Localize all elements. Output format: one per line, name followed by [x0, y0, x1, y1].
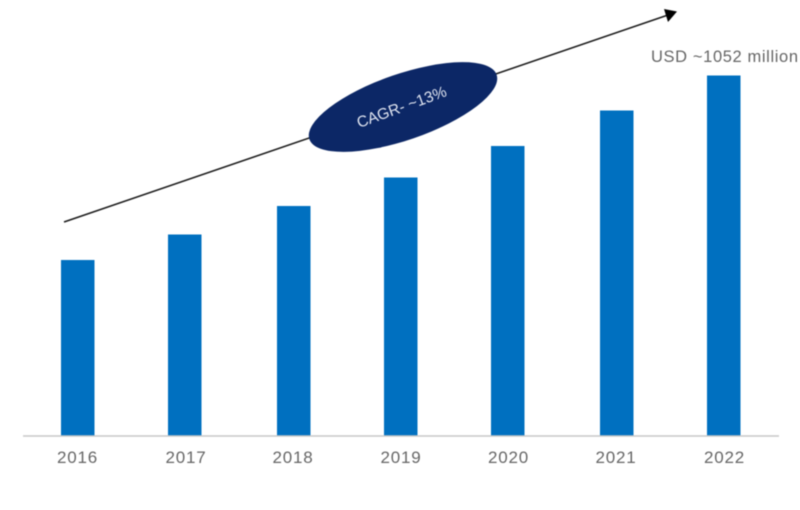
year labels: 2016 [57, 448, 98, 467]
year labels: 2022 [704, 448, 745, 467]
CAGR ellipse callout [299, 44, 507, 170]
bars [61, 76, 740, 436]
year labels: 2020 [488, 448, 529, 467]
year labels: 2021 [595, 448, 637, 467]
value label: USD ~1052 million [651, 48, 798, 66]
year labels [57, 448, 745, 467]
year labels: 2019 [380, 448, 422, 467]
year labels: 2017 [165, 448, 207, 467]
x axis [23, 435, 779, 437]
year labels: 2018 [272, 448, 314, 467]
growth arrow [64, 9, 677, 222]
CAGR ellipse callout: CAGR- ~13% [355, 83, 449, 132]
